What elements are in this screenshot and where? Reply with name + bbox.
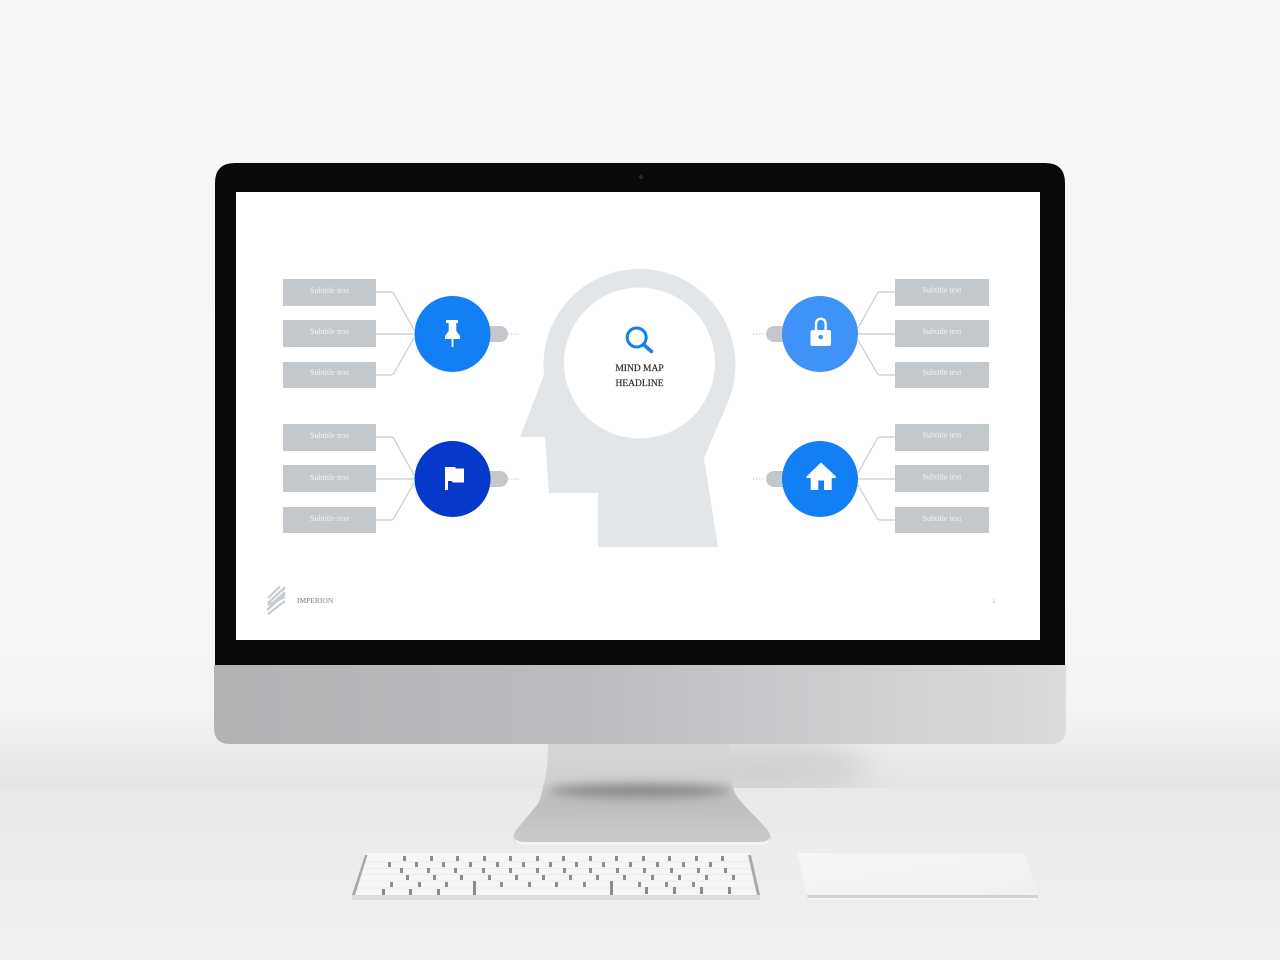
trackpad <box>797 853 1038 900</box>
desktop computer mockup scene <box>0 163 1280 910</box>
headline <box>615 364 664 389</box>
inner brain circle <box>564 288 715 438</box>
panel: top right branch: Subtitle text <box>923 327 962 336</box>
head silhouette <box>520 269 735 547</box>
page number: 2 <box>993 600 996 605</box>
panel: bottom left branch: Subtitle text <box>310 514 350 523</box>
panel: top right branch: Subtitle text <box>923 368 962 377</box>
panel: top right branch <box>753 279 989 388</box>
monitor stand <box>513 744 770 845</box>
panel: bottom right branch: Subtitle text <box>923 514 962 523</box>
icon: push pin <box>445 320 460 347</box>
icon: house <box>806 462 836 490</box>
panel: bottom left branch: Subtitle text <box>310 431 350 440</box>
panel: top left branch: Subtitle text <box>310 286 350 295</box>
panel: top left branch: Subtitle text <box>310 327 350 336</box>
icon: flag <box>445 467 464 490</box>
background wall and desk <box>0 738 1280 910</box>
panel: top left branch <box>283 279 520 388</box>
icon: padlock <box>810 319 831 346</box>
monitor chin <box>214 665 1066 744</box>
logo mark <box>267 586 285 614</box>
panel: top right branch: Subtitle text <box>923 286 962 294</box>
panel: bottom right branch: Subtitle text <box>923 472 962 482</box>
panel: top left branch: Subtitle text <box>310 368 350 377</box>
panel: bottom left branch <box>283 424 520 533</box>
panel: bottom right branch: Subtitle text <box>923 430 962 440</box>
icon: magnifier <box>627 328 652 352</box>
webcam <box>639 175 643 179</box>
keyboard <box>352 853 760 900</box>
panel: bottom right branch <box>753 424 989 533</box>
headline: HEADLINE <box>615 379 664 389</box>
panel: bottom left branch: Subtitle text <box>310 473 350 482</box>
headline: MIND MAP <box>615 364 664 374</box>
brand name: IMPERION <box>297 596 334 605</box>
screen slide panel <box>236 192 1040 640</box>
monitor black bezel <box>215 163 1065 665</box>
